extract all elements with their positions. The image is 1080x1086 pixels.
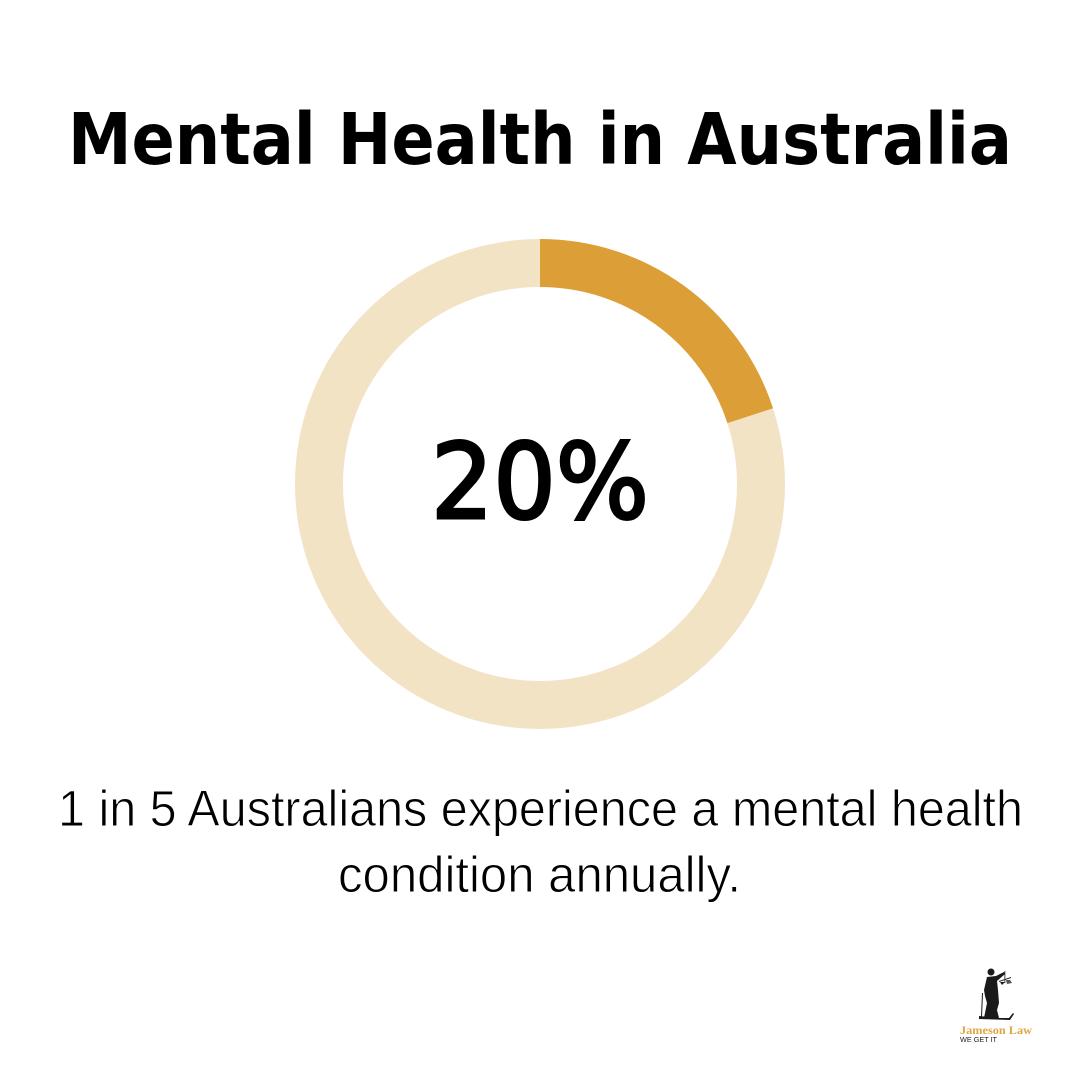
- logo name: Jameson Law: [960, 1025, 1033, 1037]
- center percentage: 20%: [431, 421, 649, 543]
- description text: [58, 780, 1023, 903]
- logo: Jameson Law: [960, 968, 1033, 1044]
- ring track: [319, 263, 761, 705]
- description text: condition annually.: [338, 846, 741, 903]
- ring highlighted segment: [540, 239, 773, 423]
- logo tagline: WE GET IT: [960, 1037, 998, 1044]
- icon: lady justice: [979, 968, 1014, 1020]
- donut chart: 20%: [319, 239, 773, 705]
- description text: 1 in 5 Australians experience a mental health: [58, 780, 1023, 837]
